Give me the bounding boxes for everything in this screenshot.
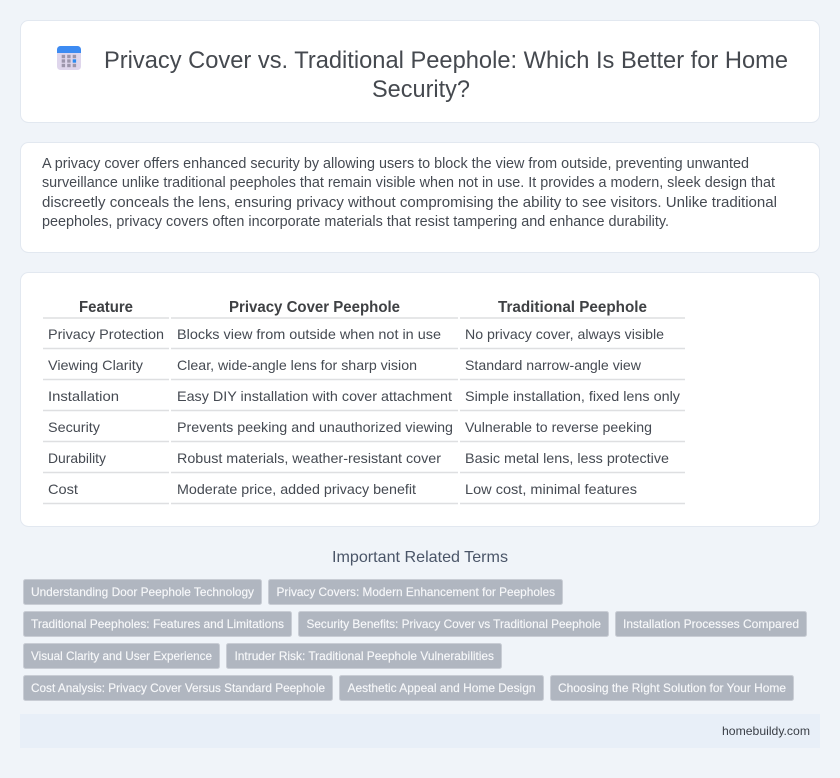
footer: homebuildy.com <box>722 724 810 738</box>
tag: privacy covers: Privacy Covers: Modern Enhancement for Peepholes <box>276 585 555 599</box>
tag: visual clarity <box>24 644 220 668</box>
table header row: Traditional Peephole <box>498 299 647 316</box>
table row: viewing clarity: Clear, wide-angle lens for sharp vision <box>177 357 417 373</box>
panel: intro paragraph <box>20 142 820 252</box>
table row: installation: Installation <box>48 388 119 404</box>
table row: cost <box>48 481 637 497</box>
intro text block <box>42 156 777 230</box>
table row: durability: Durability <box>48 450 106 466</box>
tag: installation processes <box>616 612 806 636</box>
tag: intruder risk: Intruder Risk: Traditional Peephole Vulnerabilities <box>234 649 494 663</box>
tag: security benefits: Security Benefits: Privacy Cover vs Traditional Peephole <box>306 617 601 631</box>
table header row: Privacy Cover Peephole <box>229 299 400 316</box>
tag: cost analysis <box>24 676 332 700</box>
tag: visual clarity: Visual Clarity and User Experience <box>31 649 212 663</box>
tag: traditional peepholes <box>24 612 292 636</box>
table row: privacy protection <box>48 326 664 342</box>
intro text block: surveillance unlike traditional peepholes that remain visible when not in use. It provides a modern, sleek design that <box>42 175 775 191</box>
table row: viewing clarity <box>48 357 642 373</box>
tag: aesthetic appeal <box>340 676 544 700</box>
table row: security: Vulnerable to reverse peeking <box>465 419 652 435</box>
tag: privacy covers <box>268 580 562 604</box>
table row: installation: Easy DIY installation with cover attachment <box>177 388 452 404</box>
table row: security: Security <box>48 419 100 435</box>
table header row: Feature <box>79 299 133 316</box>
table row: privacy protection: Privacy Protection <box>48 326 164 342</box>
table row: viewing clarity: Viewing Clarity <box>48 357 143 373</box>
intro text block: A privacy cover offers enhanced security by allowing users to block the view from outside, preventing unwanted <box>42 156 749 172</box>
intro text block: peepholes, privacy covers often incorporate materials that resist tampering and enhance durability. <box>42 214 669 230</box>
related term tags <box>24 580 806 700</box>
footer <box>20 714 820 748</box>
table row: cost: Moderate price, added privacy benefit <box>177 481 416 497</box>
title <box>104 47 788 103</box>
tag: choosing the right solution: Choosing the Right Solution for Your Home <box>558 681 786 695</box>
table row: security: Prevents peeking and unauthorized viewing <box>177 419 453 435</box>
tag: intruder risk <box>226 644 502 668</box>
table row: viewing clarity: Standard narrow-angle view <box>465 357 642 373</box>
title: Privacy Cover vs. Traditional Peephole: Which Is Better for Home <box>104 47 788 74</box>
panel: comparison table <box>20 272 820 526</box>
table row: durability <box>48 450 669 466</box>
tag: understanding door peephole technology: Understanding Door Peephole Technology <box>31 585 254 599</box>
table row: installation <box>48 388 680 404</box>
table row: installation: Simple installation, fixed lens only <box>465 388 680 404</box>
tag: aesthetic appeal: Aesthetic Appeal and Home Design <box>348 681 536 695</box>
table row: privacy protection: Blocks view from outside when not in use <box>177 326 441 342</box>
tag: traditional peepholes: Traditional Peepholes: Features and Limitations <box>31 617 284 631</box>
panel: title header <box>20 20 820 122</box>
tag: choosing the right solution <box>550 676 794 700</box>
table row: privacy protection: No privacy cover, always visible <box>465 326 664 342</box>
tag: installation processes: Installation Processes Compared <box>623 617 799 631</box>
table row: durability: Robust materials, weather-resistant cover <box>177 450 441 466</box>
tag: understanding door peephole technology <box>24 580 262 604</box>
table row: cost: Low cost, minimal features <box>465 481 637 497</box>
tag: security benefits <box>298 612 608 636</box>
title: Security? <box>372 76 470 103</box>
intro text block: discreetly conceals the lens, ensuring privacy without compromising the ability to see visitors. Unlike traditional <box>42 195 777 211</box>
heading: important related terms: Important Related Terms <box>332 549 508 566</box>
tag: cost analysis: Cost Analysis: Privacy Cover Versus Standard Peephole <box>31 681 325 695</box>
table header row <box>79 299 647 316</box>
table row: durability: Basic metal lens, less protective <box>465 450 669 466</box>
icon: calendar grid <box>57 46 81 70</box>
table row: security <box>48 419 652 435</box>
table row: cost: Cost <box>48 481 78 497</box>
